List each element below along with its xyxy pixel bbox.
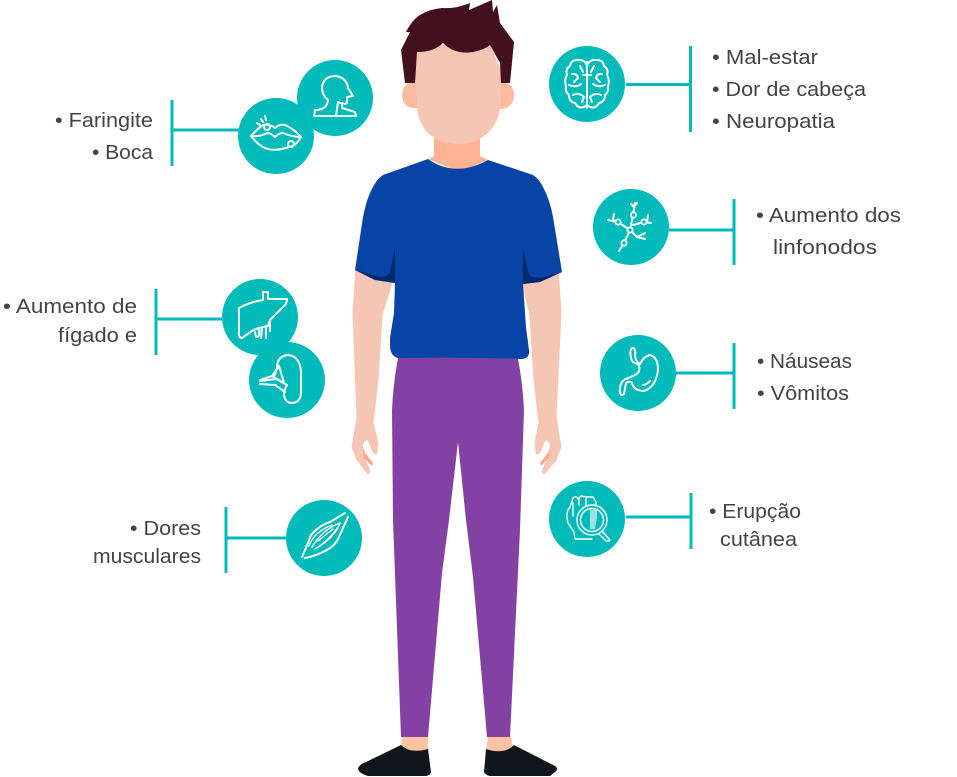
icon: head and throat [297,60,373,136]
left arm [352,268,392,474]
icon: lips [238,98,314,174]
connector: liver [156,289,226,355]
text: muscle symptoms: musculares [93,545,201,568]
text: lymph node symptoms: linfonodos [773,236,877,259]
text: mouth symptoms: • Faringite [55,109,153,132]
neck [428,138,488,172]
text: muscle symptoms [93,517,201,568]
text: liver symptoms: fígado e [58,324,137,347]
text: muscle symptoms: • Dores [130,517,201,540]
text: skin symptoms: cutânea [720,528,798,551]
icon: brain [549,46,625,122]
text: neurological symptoms: • Dor de cabeça [712,78,867,101]
text: liver symptoms: • Aumento de [3,295,137,318]
connector: stomach [676,343,734,409]
hair [401,0,514,83]
text: mouth symptoms [55,109,154,164]
shirt [355,159,562,359]
icon: liver [222,279,298,355]
icon: stomach [600,335,676,411]
right shoe [484,745,557,776]
hand shading [362,444,551,466]
icon: skin rash with magnifier [549,481,625,557]
text: neurological symptoms [712,46,867,133]
connector: mouth [172,100,242,166]
text: lymph node symptoms: • Aumento dos [756,204,901,227]
text: skin symptoms [709,500,801,551]
icon: muscle [286,500,362,576]
trousers [392,358,524,737]
sleeve shadows [355,248,562,284]
text: stomach symptoms: • Náuseas [757,350,852,373]
text: stomach symptoms [757,350,852,405]
text: mouth symptoms: • Boca [92,141,154,164]
icon: lymph nodes [593,189,669,265]
connector: lymph nodes [669,199,734,265]
right arm [522,268,561,474]
text: liver symptoms [3,295,137,347]
connector: skin [626,493,691,549]
ankles [400,737,514,752]
text: lymph node symptoms [756,204,901,259]
ears [402,83,514,109]
icon: kidney [249,342,325,418]
text: stomach symptoms: • Vômitos [757,382,849,405]
connector: brain [626,46,690,132]
left shoe [358,745,431,776]
connector: muscles [226,507,290,573]
text: skin symptoms: • Erupção [709,500,801,523]
face [415,45,501,144]
text: neurological symptoms: • Neuropatia [712,110,836,133]
figure: person [352,0,562,776]
text: neurological symptoms: • Mal-estar [712,46,818,69]
